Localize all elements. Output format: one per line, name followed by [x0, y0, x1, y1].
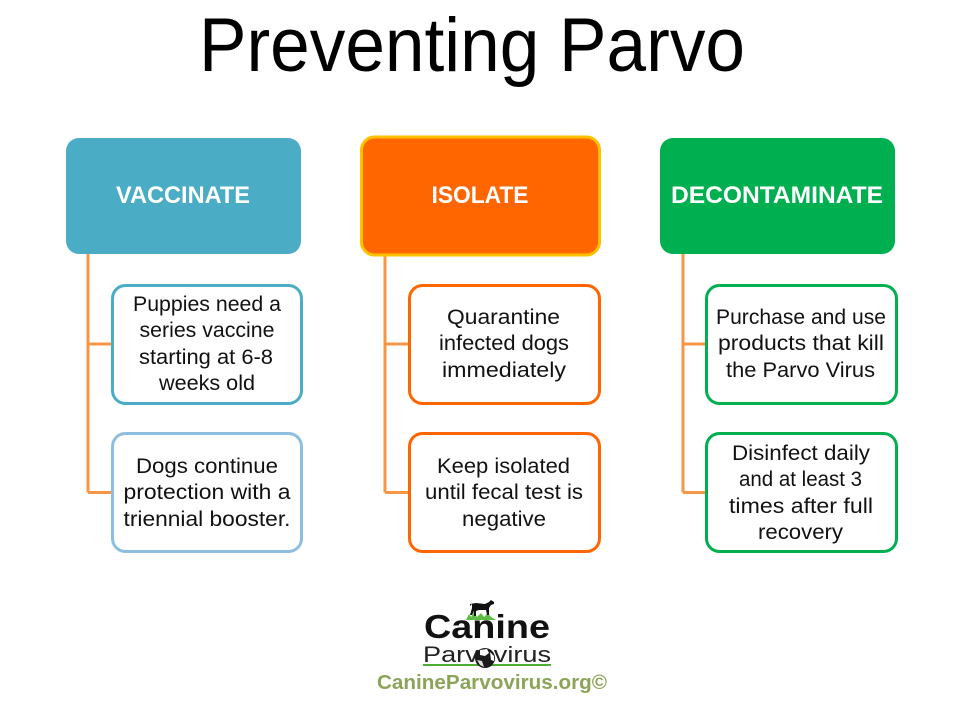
card: disinfect daily: Disinfect daily — [732, 442, 871, 465]
card: quarantine: infected dogs — [439, 332, 569, 355]
card: keep isolated — [410, 434, 600, 552]
heading: vaccinate — [66, 138, 301, 254]
card: disinfect daily — [706, 434, 896, 552]
card: disinfect daily: and at least 3 — [739, 468, 862, 491]
card: quarantine — [410, 286, 600, 404]
card: puppies vaccine — [112, 286, 302, 404]
panel: vaccinate — [66, 138, 302, 552]
panel: decontaminate — [660, 138, 896, 552]
card: puppies vaccine: Puppies need a — [133, 293, 281, 316]
url: CanineParvovirus.org© — [377, 672, 607, 694]
logo underline — [423, 664, 551, 666]
card: puppies vaccine: starting at 6-8 — [139, 346, 273, 369]
icon: grass — [466, 612, 496, 620]
card: triennial booster: protection with a — [124, 481, 291, 504]
logo — [377, 600, 607, 694]
card: purchase products: Purchase and use — [716, 306, 886, 329]
card: puppies vaccine: weeks old — [158, 372, 255, 395]
connector: decontaminate — [683, 254, 706, 492]
heading: isolate: ISOLATE — [432, 182, 528, 209]
title: Preventing Parvo — [199, 3, 745, 88]
card: purchase products: the Parvo Virus — [726, 359, 875, 382]
card: disinfect daily: times after full — [729, 495, 873, 518]
heading: decontaminate — [660, 138, 895, 254]
card: triennial booster — [112, 434, 302, 552]
icon: dog — [470, 600, 494, 616]
heading: decontaminate: DECONTAMINATE — [671, 182, 883, 209]
card: keep isolated: Keep isolated — [437, 455, 570, 478]
logo wordmark: Canine: Canine — [424, 608, 550, 645]
panel: isolate — [362, 137, 600, 552]
connector: isolate — [385, 256, 409, 492]
icon: globe — [475, 648, 495, 668]
card: purchase products: products that kill — [718, 332, 884, 355]
heading: vaccinate: VACCINATE — [116, 182, 250, 209]
card: quarantine: immediately — [442, 359, 567, 382]
card: triennial booster: triennial booster. — [124, 508, 290, 531]
logo wordmark: Parvovirus: Parvovirus — [423, 642, 551, 667]
card: disinfect daily: recovery — [758, 521, 844, 544]
card: keep isolated: until fecal test is — [425, 481, 583, 504]
card: purchase products — [706, 286, 896, 404]
card: triennial booster: Dogs continue — [136, 455, 278, 478]
card: puppies vaccine: series vaccine — [140, 319, 274, 342]
card: keep isolated: negative — [462, 508, 546, 531]
heading: isolate — [362, 137, 600, 255]
connector: vaccinate — [88, 254, 112, 492]
card: quarantine: Quarantine — [447, 306, 560, 329]
